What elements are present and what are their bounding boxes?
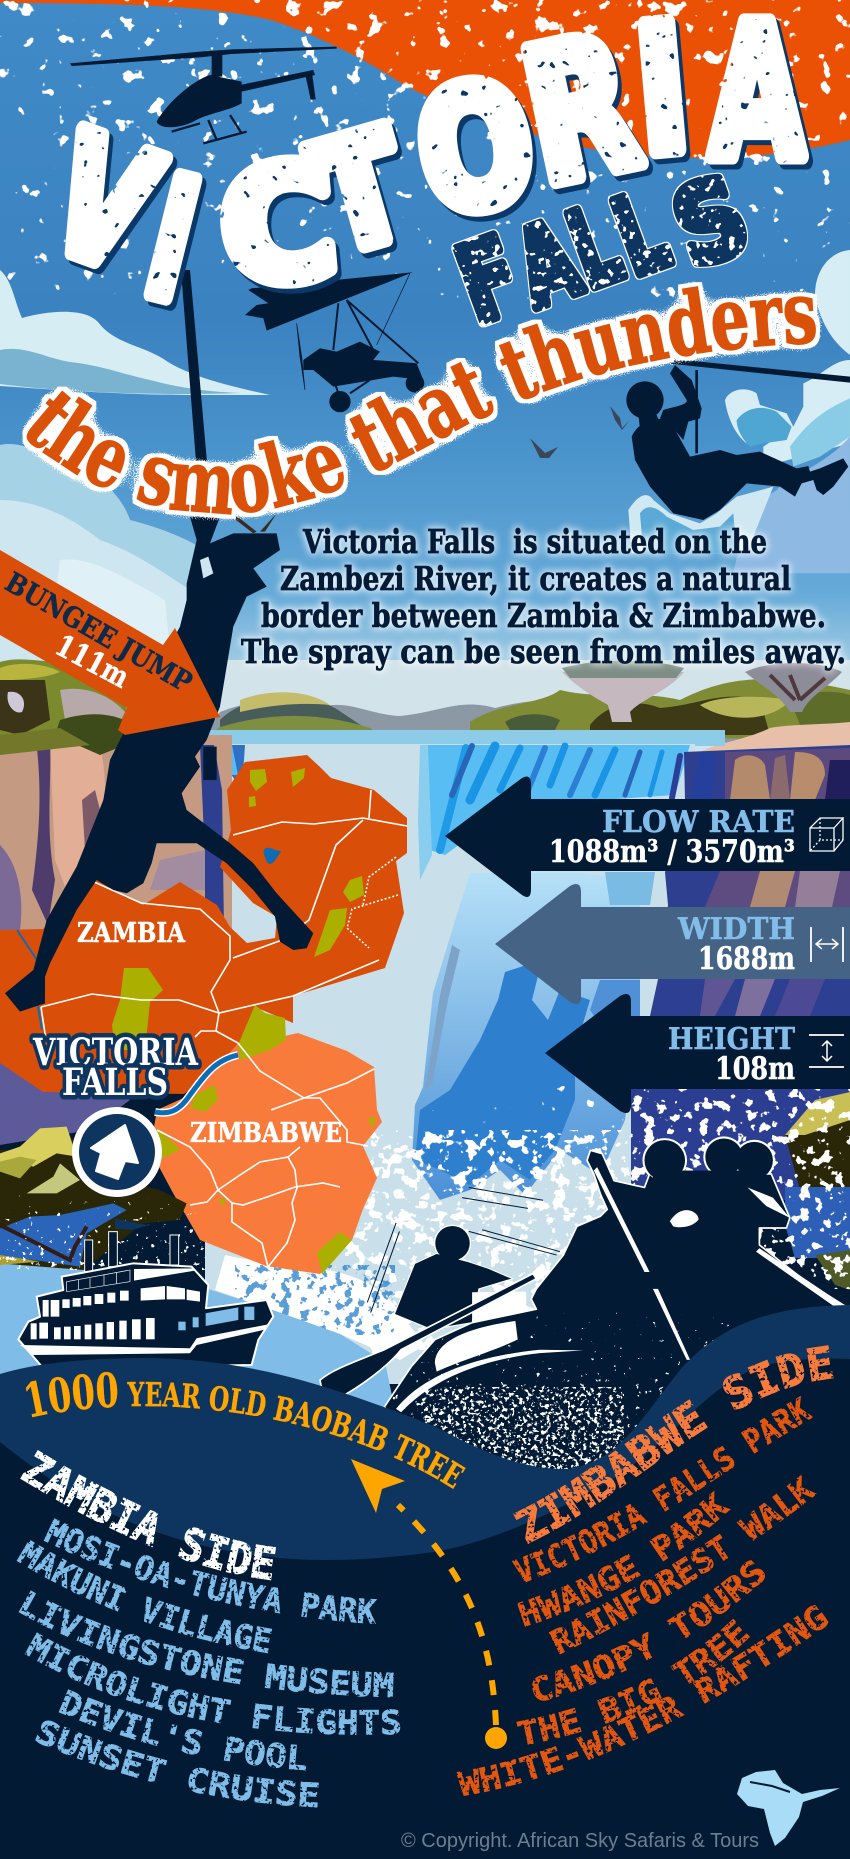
map: Zambia	[0, 755, 407, 1094]
map: roads	[41, 790, 407, 1267]
left cliff	[0, 735, 232, 935]
stat arrow: flow rate	[445, 777, 850, 897]
hull splatter	[392, 1312, 729, 1469]
far shore and trees	[205, 660, 850, 752]
title: Victoria: I	[130, 144, 214, 338]
river band	[205, 730, 725, 746]
title: Victoria: R	[507, 0, 654, 227]
right tree	[785, 1092, 850, 1290]
Zimbabwe side list: VICTORIA FALLS PARK	[512, 1396, 812, 1582]
orange sun blob	[0, 0, 850, 158]
paddle steamer boat	[18, 1218, 273, 1368]
blue foam texture	[235, 1265, 395, 1335]
white spray splatter	[330, 1060, 850, 1355]
bungee jump arrow	[0, 550, 220, 735]
Zambia side list: DEVIL'S POOL	[58, 1689, 306, 1770]
left purple lower rock	[0, 1060, 130, 1145]
paddle	[320, 1274, 536, 1402]
map: Zimbabwe	[150, 1033, 382, 1274]
icon: width	[811, 927, 843, 962]
icon: cube	[810, 818, 843, 851]
microlight	[245, 272, 424, 412]
baobab tree 1	[562, 660, 684, 722]
label: 1000 year old baobab tree: 1000 YEAR OLD BAOBAB TREE	[26, 1372, 466, 1489]
clouds right	[628, 250, 850, 573]
rafter head outlines	[642, 1136, 775, 1183]
stat arrow: width: WIDTH	[677, 912, 795, 947]
stat arrow: width: 1688m	[698, 941, 795, 977]
Zimbabwe side list: WHITE-WATER RAFTING	[456, 1604, 828, 1796]
right cliff	[631, 745, 850, 1090]
title: Victoria: O	[403, 44, 548, 254]
sky background	[0, 0, 850, 760]
Zambia side list: LIVINGSTONE MUSEUM	[18, 1590, 394, 1698]
front rafter	[394, 1225, 513, 1329]
waterfall base	[205, 744, 695, 1384]
title: Victoria	[27, 0, 804, 338]
map: rivers and lake	[17, 850, 277, 1113]
bungee jump label: BUNGEE JUMP	[0, 565, 198, 699]
subtitle: Falls: S	[658, 152, 764, 292]
map label: Victoria Falls	[32, 1030, 199, 1104]
Zimbabwe side list: THE BIG TREE	[516, 1618, 750, 1745]
subtitle: Falls: A	[502, 198, 595, 332]
waterfall central column	[412, 872, 655, 1200]
icon: Africa with plane	[737, 1770, 840, 1846]
left shrubs and tree	[0, 659, 130, 755]
title: Victoria: C	[214, 130, 343, 321]
stat arrow: width	[495, 884, 850, 1004]
copyright: © Copyright. African Sky Safaris & Tours	[401, 1830, 759, 1852]
clouds left	[0, 270, 270, 700]
Zambia side list	[16, 1450, 400, 1808]
Zimbabwe side list: HWANGE PARK	[517, 1490, 731, 1627]
map label: Victoria Falls: FALLS	[62, 1060, 168, 1104]
bungee jumper	[5, 513, 313, 1012]
stat arrow: height	[545, 994, 850, 1113]
lower wave mid blue	[0, 1305, 850, 1859]
slogan: the smoke that thunders: the smoke that thunders	[21, 280, 822, 522]
Zimbabwe side list: RAINFOREST WALK	[548, 1474, 817, 1654]
map: national parks	[112, 768, 376, 1274]
stat arrow: flow rate: 1088m³ / 3570m³	[549, 834, 795, 870]
baobab tree 2	[745, 663, 842, 712]
map label: Zimbabwe: ZIMBABWE	[190, 1118, 342, 1149]
birds	[365, 397, 630, 458]
Zimbabwe side list	[456, 1345, 834, 1796]
Zimbabwe side list: CANOPY TOURS	[532, 1560, 765, 1701]
Zambia side list: MOSI-OA-TUNYA PARK	[44, 1518, 378, 1624]
spray splatter across the top	[0, 0, 850, 300]
helicopter	[70, 47, 337, 143]
spray behind rafters	[631, 1089, 850, 1200]
waterfall top streaks	[208, 745, 690, 880]
raft and crew mass	[384, 1150, 850, 1475]
white foam band	[215, 1255, 425, 1360]
bottom left tree	[0, 1127, 207, 1270]
intro paragraph	[241, 522, 846, 671]
subtitle: Falls: F	[443, 214, 536, 348]
Zambia side list: SUNSET CRUISE	[35, 1720, 319, 1808]
rafters	[320, 1136, 850, 1475]
Zambia side list: MICROLIGHT FLIGHTS	[24, 1632, 400, 1735]
title: Victoria: T	[297, 98, 425, 288]
light blue river	[0, 1263, 395, 1410]
dashed arrow to baobab	[351, 1459, 507, 1749]
map label: Zambia: ZAMBIA	[77, 918, 186, 949]
icon: height	[809, 1035, 844, 1067]
subtitle: Falls: L	[554, 182, 636, 313]
subtitle: Falls: L	[599, 170, 683, 301]
location marker	[72, 1107, 162, 1197]
rafter heads	[644, 1138, 773, 1198]
map label: Victoria Falls: VICTORIA	[32, 1030, 199, 1074]
stat arrow: height: 108m	[715, 1051, 795, 1087]
stat arrow: height: HEIGHT	[668, 1022, 796, 1057]
bungee height: 111m	[49, 628, 135, 696]
stat arrow: flow rate: FLOW RATE	[602, 805, 795, 840]
rope of bungee	[181, 270, 207, 462]
heading: Zambia side: ZAMBIA SIDE	[20, 1450, 276, 1580]
lower wave dark navy	[0, 1359, 850, 1859]
heading: Zimbabwe side: ZIMBABWE SIDE	[513, 1345, 834, 1544]
title: Victoria: V	[27, 97, 179, 309]
zipliner	[626, 357, 850, 520]
Zambia side list: MAKUNI VILLAGE	[16, 1540, 272, 1654]
horizon haze	[0, 660, 850, 745]
subtitle: Falls	[443, 152, 764, 348]
